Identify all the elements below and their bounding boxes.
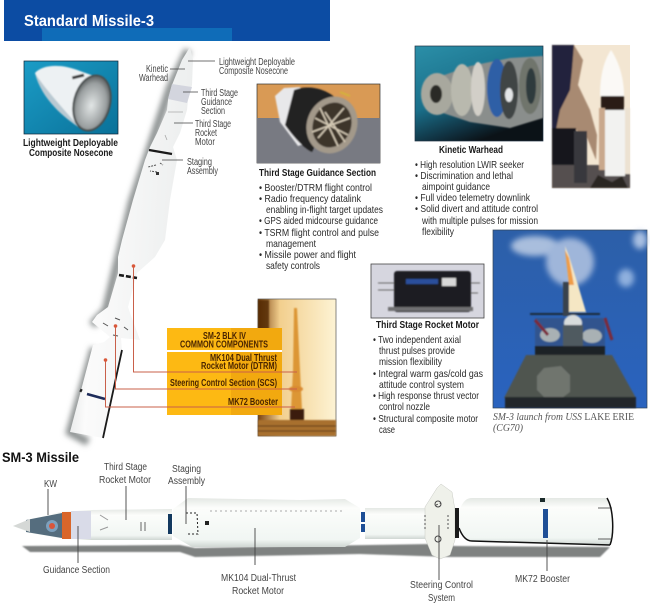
text block: third stage guidance section: • Radio frequency datalink [259, 193, 362, 205]
labels: horizontal missile: KW [44, 479, 57, 490]
text block: kinetic warhead: • High resolution LWIR seeker [415, 159, 524, 171]
photo: launch with common components [258, 299, 336, 436]
label: MK104 [201, 353, 277, 372]
labels: horizontal missile: Steering Control [410, 580, 473, 591]
labels: horizontal missile: Third Stage [104, 462, 147, 473]
labels: diagonal missile: Third Stage [195, 119, 231, 130]
steering control section [425, 484, 459, 559]
text block: third stage rocket motor: • Integral warm gas/cold gas [373, 368, 483, 380]
labels: diagonal missile [139, 57, 295, 177]
text block: third stage guidance section: • GPS aided midcourse guidance [259, 215, 378, 227]
title: Standard Missile-3 [24, 13, 154, 30]
text block: third stage guidance section: management [266, 238, 316, 250]
horizontal SM-3 missile [13, 484, 613, 559]
title banner [4, 0, 330, 41]
label: MK104: Rocket Motor (DTRM) [201, 361, 277, 372]
caption: nosecone: Composite Nosecone [29, 147, 113, 159]
text block: kinetic warhead: aimpoint guidance [422, 181, 490, 193]
text block: third stage guidance section: • Missile power and flight [259, 249, 356, 261]
text block: kinetic warhead: Kinetic Warhead [439, 144, 503, 156]
labels: horizontal missile [43, 462, 571, 604]
label: MK72 booster: MK72 Booster [228, 397, 278, 408]
text block: third stage guidance section: • TSRM flight control and pulse [259, 227, 379, 239]
photo: lightweight deployable composite nosecone [24, 61, 118, 136]
text block: kinetic warhead: • Full video telemetry downlink [415, 192, 531, 204]
heading: SM-3 missile: SM-3 Missile [2, 449, 79, 465]
labels: horizontal missile: MK72 Booster [515, 574, 571, 585]
labels: diagonal missile: Warhead [139, 73, 168, 84]
labels: horizontal missile: Staging [172, 464, 201, 475]
text block: third stage guidance section: Third Stage Guidance Section [259, 167, 376, 179]
diagonal SM-3 missile [70, 47, 193, 442]
text block: kinetic warhead: flexibility [422, 226, 455, 238]
text block: third stage rocket motor: • High response thrust vector [373, 390, 479, 402]
labels: diagonal missile: Third Stage [201, 88, 238, 99]
labels: diagonal missile: Section [201, 106, 225, 117]
text block: third stage guidance section [259, 167, 383, 272]
labels: diagonal missile: Guidance [201, 97, 232, 108]
shadow [22, 544, 610, 557]
MK104 motor [173, 498, 360, 547]
labels: diagonal missile: Rocket [195, 128, 217, 139]
text block: kinetic warhead: • Discrimination and lethal [415, 170, 513, 182]
labels: horizontal missile: System [428, 593, 455, 604]
photo: third stage guidance section [257, 84, 380, 163]
labels: horizontal missile: Rocket Motor [232, 586, 285, 597]
text block: third stage rocket motor: Third Stage Rocket Motor [376, 319, 479, 331]
labels: diagonal missile: Composite Nosecone [219, 66, 288, 77]
caption: nosecone: Lightweight Deployable [23, 137, 118, 149]
caption: SM-3 launch photo: SM-3 launch from USS LAKE ERIE [493, 412, 634, 423]
labels: horizontal missile: Rocket Motor [99, 475, 152, 486]
text block: kinetic warhead [415, 144, 538, 238]
photo: kinetic warhead [415, 46, 543, 141]
text block: third stage rocket motor: thrust pulses provide [379, 345, 455, 357]
label: steering control section: Steering Control Section (SCS) [170, 378, 277, 389]
panel: SM-2 BLK IV common components [167, 328, 282, 415]
caption: nosecone [23, 137, 118, 159]
text block: third stage rocket motor: case [379, 424, 395, 436]
photo: SM-3 launch from USS Lake Erie [493, 230, 647, 408]
callout lines: horizontal missile [48, 486, 547, 580]
text block: third stage guidance section: • Booster/DTRM flight control [259, 182, 372, 194]
callout lines: common components [104, 264, 297, 407]
labels: horizontal missile: MK104 Dual-Thrust [221, 573, 296, 584]
label: MK104: MK104 Dual Thrust [210, 353, 277, 364]
callout lines: diagonal missile [162, 61, 215, 160]
photo: third stage rocket motor [371, 264, 484, 318]
heading: common components: SM-2 BLK IV [203, 331, 246, 342]
text block: third stage rocket motor: • Structural composite motor [373, 413, 478, 425]
text block: third stage guidance section: enabling in-flight target updates [266, 204, 383, 216]
labels: diagonal missile: Kinetic [146, 64, 168, 75]
photo: missile on launcher [552, 45, 630, 188]
labels: diagonal missile: Motor [195, 137, 216, 148]
text block: kinetic warhead: with multiple pulses for mission [421, 215, 538, 227]
labels: diagonal missile: Staging [187, 157, 212, 168]
MK72 booster [459, 498, 613, 545]
labels: diagonal missile: Lightweight Deployable [219, 57, 295, 68]
forward stages [13, 509, 172, 540]
text block: third stage rocket motor: • Two independent axial [373, 334, 461, 346]
text block: third stage rocket motor: mission flexibility [379, 356, 443, 368]
text block: kinetic warhead: • Solid divert and attitude control [415, 203, 538, 215]
text block: third stage rocket motor: control nozzle [379, 401, 430, 413]
text block: third stage rocket motor: attitude control system [379, 379, 464, 391]
text block: third stage guidance section: safety controls [266, 260, 320, 272]
caption: SM-3 launch photo: (CG70) [493, 423, 523, 434]
text block: third stage rocket motor [373, 319, 483, 436]
heading: common components: COMMON COMPONENTS [180, 340, 268, 350]
labels: diagonal missile: Assembly [187, 166, 218, 177]
heading: common components [180, 331, 268, 350]
labels: horizontal missile: Guidance Section [43, 565, 110, 576]
labels: horizontal missile: Assembly [168, 476, 205, 487]
caption: SM-3 launch photo [493, 412, 634, 434]
forward booster body [365, 508, 425, 539]
